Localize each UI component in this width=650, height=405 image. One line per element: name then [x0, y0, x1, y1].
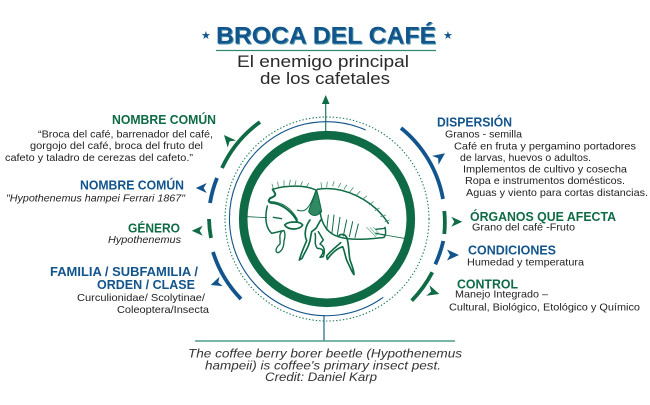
caption: hampeii) is coffee's primary insect pest. — [205, 358, 441, 372]
arrow — [192, 226, 203, 236]
arrow — [426, 285, 441, 299]
caption: Credit: Daniel Karp — [265, 370, 377, 384]
text block: Ropa e instrumentos domésticos. — [465, 176, 625, 187]
panel: left column — [5, 112, 260, 316]
panel: control — [412, 272, 640, 313]
heading: NOMBRE COMÚN — [112, 112, 216, 127]
text block — [449, 289, 640, 313]
subtitle: de los cafetales — [260, 69, 390, 88]
text block: Humedad y temperatura — [467, 258, 584, 269]
text block: Cultural, Biológico, Etológico y Químico — [449, 302, 640, 313]
heading: FAMILIA / SUBFAMILIA / — [50, 264, 198, 279]
heading: CONTROL — [457, 276, 518, 291]
arrow — [196, 183, 207, 193]
text block: Implementos de cultivo y cosecha — [463, 165, 627, 176]
heading — [50, 264, 198, 292]
heading: GÉNERO — [128, 221, 180, 236]
arrow — [451, 217, 462, 227]
text block — [77, 293, 209, 316]
icon: left star: ★ — [201, 30, 211, 42]
text block: Café en fruta y pergamino portadores — [454, 142, 636, 153]
caption: The coffee berry borer beetle (Hypothenemus — [188, 347, 462, 361]
text block: gorgojo del café, broca del fruto del — [30, 141, 203, 152]
arrow: top vertical — [322, 95, 330, 131]
panel: órganos — [444, 209, 617, 234]
text block: Curculionidae/ Scolytinae/ — [77, 293, 205, 304]
panel: género — [108, 219, 211, 246]
text block: cafeto y taladro de cerezas del cafeto.” — [5, 153, 194, 164]
panel: familia — [50, 252, 241, 316]
text block: “Broca del café, barrenador del café, — [38, 130, 213, 140]
arc — [442, 211, 447, 234]
title: BROCA DEL CAFÉ — [216, 22, 436, 50]
icon: right star: ★ — [443, 30, 453, 42]
text block: Aguas y viento para cortas distancias. — [466, 188, 648, 199]
heading: DISPERSIÓN — [437, 115, 512, 130]
arc — [412, 272, 432, 301]
arc — [209, 219, 211, 238]
heading: CONDICIONES — [468, 242, 556, 257]
arc — [210, 178, 217, 203]
arrow — [220, 131, 236, 148]
connector: bottom line — [195, 315, 455, 341]
subtitle — [237, 52, 409, 88]
text block: Grano del café -Fruto — [472, 223, 575, 234]
heading: ÓRGANOS QUE AFECTA — [470, 209, 617, 224]
text block: Granos - semilla — [445, 130, 522, 141]
caption — [188, 347, 462, 384]
arrow — [447, 250, 459, 260]
text block: de larvas, huevos o adultos. — [460, 153, 591, 164]
title block — [201, 22, 453, 88]
dotted ring — [225, 117, 429, 321]
panel: right column — [401, 115, 648, 313]
text block: Coleoptera/Insecta — [117, 305, 209, 316]
text block: Manejo Integrado – — [455, 289, 548, 300]
text block: "Hypothenemus hampei Ferrari 1867" — [6, 194, 185, 204]
panel: dispersión — [401, 115, 648, 199]
arrow — [209, 277, 223, 290]
panel: condiciones — [435, 241, 584, 269]
arc — [401, 128, 443, 199]
icon: beetle — [247, 180, 404, 275]
arc — [435, 241, 443, 264]
text block — [5, 130, 213, 164]
heading: NOMBRE COMÚN — [80, 178, 184, 193]
panel: nombre común — [5, 112, 260, 168]
thin blue arc — [229, 122, 383, 316]
panel: nombre científico — [6, 178, 217, 204]
arc — [213, 252, 241, 299]
heading: ORDEN / CLASE — [97, 277, 195, 292]
central circle with beetle — [225, 117, 429, 321]
thick green ring — [243, 135, 411, 303]
arrow — [432, 149, 448, 165]
text block — [445, 130, 648, 199]
arc — [222, 122, 260, 168]
text block: Hypothenemus — [108, 235, 181, 246]
subtitle: El enemigo principal — [237, 52, 409, 71]
